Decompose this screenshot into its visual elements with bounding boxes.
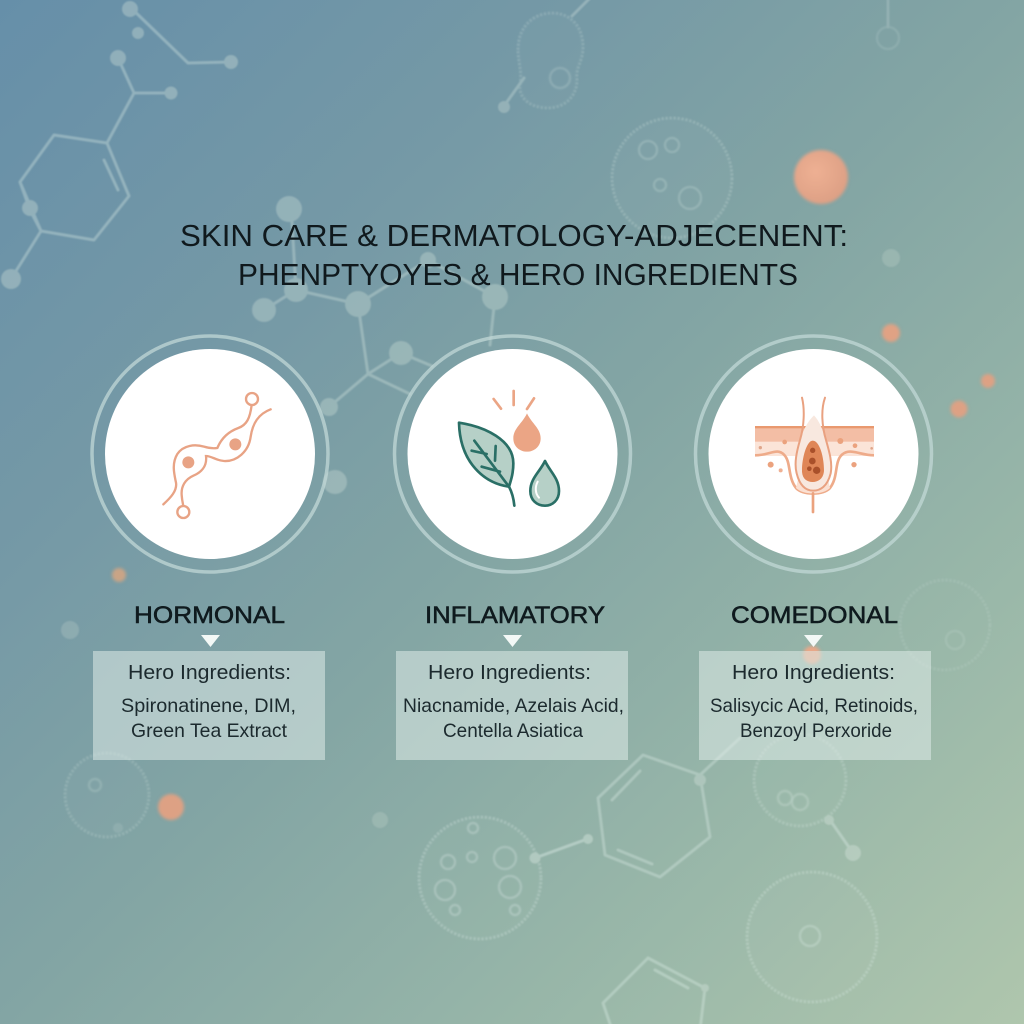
hormonal ring and disc — [92, 336, 328, 572]
hormonal ingredients box: Spironatinene, DIM, — [121, 695, 296, 717]
panel: comedonal — [696, 336, 932, 760]
inflamatory arrow — [503, 635, 522, 647]
title: SKIN CARE & DERMATOLOGY-ADJECENENT: — [180, 218, 848, 253]
cell: lower right — [754, 734, 861, 861]
title — [180, 218, 848, 292]
comedonal ingredients box: Hero Ingredients: — [732, 661, 895, 684]
hormonal ingredients box: Green Tea Extract — [131, 720, 288, 742]
title: PHENPTYOYES & HERO INGREDIENTS — [238, 257, 798, 292]
hormonal arrow — [201, 635, 220, 647]
molecule: lower hexagon — [598, 738, 740, 877]
molecule: bottom hexagon — [603, 958, 709, 1024]
molecule: centre — [252, 196, 508, 494]
comedonal heading: COMEDONAL — [731, 602, 898, 629]
icon: leaf and droplets — [459, 391, 559, 506]
scattered light dots — [61, 249, 900, 828]
decorative orange orbs — [112, 150, 995, 820]
cell: bottom centre — [419, 817, 593, 939]
cell: top right — [877, 0, 899, 49]
cell: large bottom right — [747, 872, 877, 1002]
comedonal ring and disc — [696, 336, 932, 572]
comedonal ingredients box — [699, 651, 931, 760]
panel: inflamatory — [394, 336, 630, 760]
inflamatory ingredients box: Hero Ingredients: — [428, 661, 591, 684]
panel: hormonal — [92, 336, 328, 760]
hormonal heading: HORMONAL — [134, 602, 285, 629]
cell: lower left — [65, 753, 149, 837]
molecule: top left — [1, 1, 238, 289]
inflamatory ingredients box — [396, 651, 628, 760]
cell: right — [900, 580, 990, 670]
cell: upper right — [612, 118, 732, 238]
comedonal arrow — [804, 635, 823, 647]
hormonal ingredients box — [93, 651, 325, 760]
inflamatory ingredients box: Centella Asiatica — [443, 720, 583, 742]
inflamatory heading: INFLAMATORY — [425, 602, 605, 629]
icon: clogged pore cross-section — [755, 398, 874, 512]
cell: top centre — [498, 0, 592, 113]
inflamatory ingredients box: Niacnamide, Azelais Acid, — [403, 695, 624, 717]
comedonal ingredients box: Benzoyl Perxoride — [740, 720, 892, 742]
hormonal ingredients box: Hero Ingredients: — [128, 661, 291, 684]
icon: hormone molecule chain — [163, 393, 271, 518]
comedonal ingredients box: Salisycic Acid, Retinoids, — [710, 695, 918, 717]
inflamatory ring and disc — [394, 336, 630, 572]
